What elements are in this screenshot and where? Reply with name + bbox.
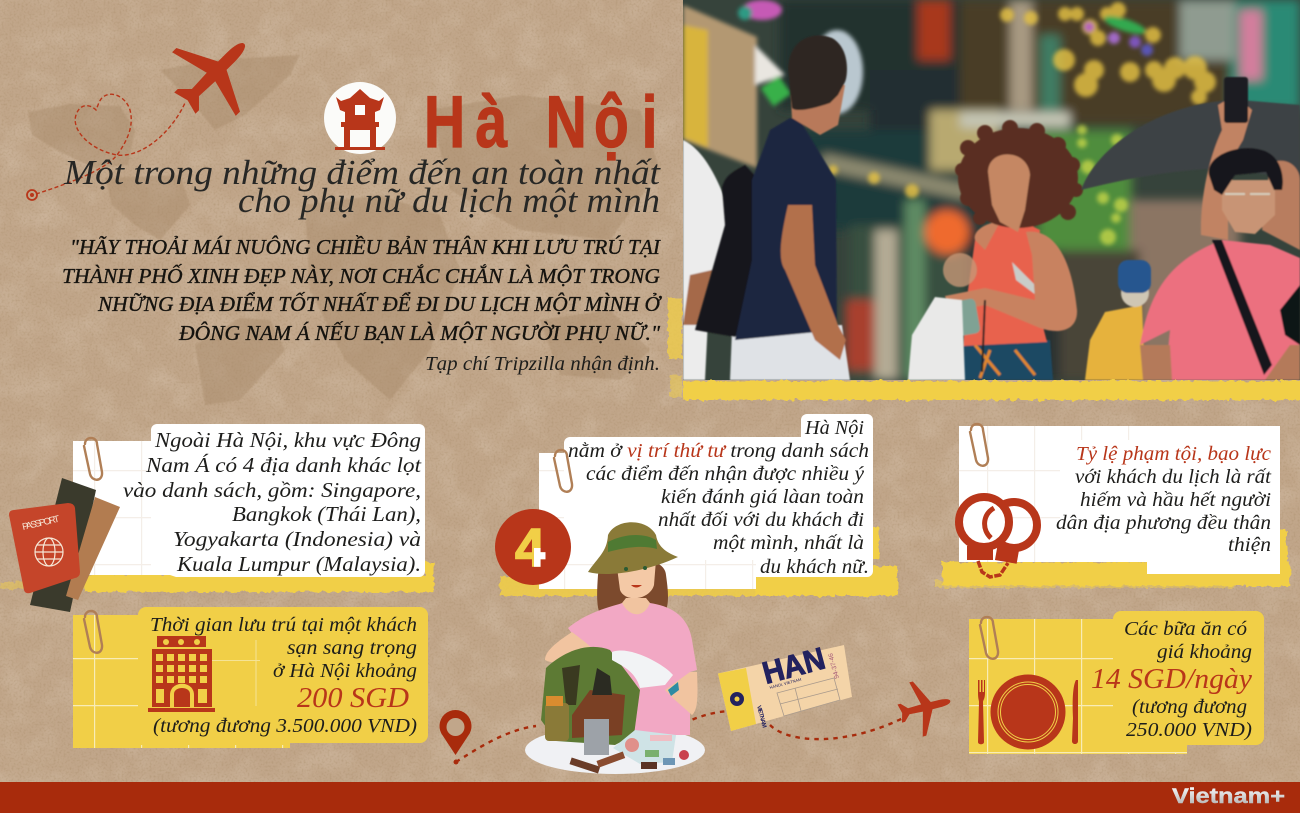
luggage tag: HAN (759, 641, 829, 691)
quote source: Tạp chí Tripzilla nhận định. (425, 354, 660, 375)
logo: Vietnam+: Vietnam+ (1172, 785, 1285, 808)
text block (150, 614, 417, 737)
text block: giá khoảng (1157, 641, 1252, 663)
quote: NHỮNG ĐỊA ĐIỂM TỐT NHẤT ĐỂ ĐI DU LỊCH MỘT MÌNH Ở (97, 292, 662, 316)
panel: meal price (969, 611, 1264, 754)
text block: Nam Á có 4 địa danh khác lọt (145, 453, 422, 477)
text block: Ngoài Hà Nội, khu vực Đông (154, 428, 421, 452)
luggage tag: HANOI, VIETNAM (769, 677, 802, 690)
backpack (541, 647, 640, 755)
text block: sạn sang trọng (287, 637, 417, 659)
text block: du khách nữ. (760, 556, 869, 578)
paperclip (554, 450, 572, 492)
text block: nằm ở vị trí thứ tư trong danh sách (568, 440, 869, 462)
subtitle: cho phụ nữ du lịch một mình (238, 182, 660, 220)
text block: với khách du lịch là rất (1075, 466, 1272, 488)
hat (588, 522, 678, 574)
text block: Hà Nội (804, 417, 864, 439)
street bokeh lights (828, 2, 1216, 245)
quote: ĐÔNG NAM Á NẾU BẠN LÀ MỘT NGƯỜI PHỤ NỮ." (178, 321, 660, 345)
panel: other destinations (0, 424, 434, 612)
icon: plate and cutlery (978, 674, 1078, 750)
yellow brush strip under photo (668, 298, 1300, 400)
icon: location pin (439, 710, 472, 764)
number badge 4 (495, 509, 571, 585)
text block (1091, 618, 1252, 741)
man with backpack (695, 35, 850, 380)
paperclip (84, 438, 102, 480)
number badge 4: 4 (515, 518, 545, 578)
icon: small airplane (893, 674, 957, 741)
people on the right with umbrella (908, 77, 1300, 380)
text block: Tỷ lệ phạm tội, bạo lực (1076, 443, 1271, 465)
icon: airplane (153, 12, 276, 135)
quote: THÀNH PHỐ XINH ĐẸP NÀY, NƠI CHẮC CHẮN LÀ MỘT TRONG (62, 264, 660, 288)
text block: 250.000 VND) (1126, 719, 1252, 741)
text block: Thời gian lưu trú tại một khách (150, 614, 417, 636)
text block: Bangkok (Thái Lan), (232, 502, 421, 526)
paperclip (84, 611, 102, 653)
text block: ở Hà Nội khoảng (273, 660, 417, 682)
text block: thiện (1228, 534, 1271, 556)
quote: "HÃY THOẢI MÁI NUÔNG CHIỀU BẢN THÂN KHI LƯU TRÚ TẠI (70, 235, 661, 259)
text block: nhất đối với du khách đi (658, 509, 864, 531)
icon: Temple of Literature gate (324, 82, 396, 154)
illustration: woman packing backpack (525, 522, 705, 774)
text block: hiếm và hầu hết người (1080, 489, 1271, 511)
text block: vào danh sách, gồm: Singapore, (123, 478, 421, 502)
luggage tag: VIETNAM (755, 705, 767, 729)
title: Hà Nội (424, 81, 657, 163)
text block: kiến đánh giá làan toàn (661, 486, 864, 508)
text block: (tương đương 3.500.000 VND) (153, 715, 417, 737)
text block: dân địa phương đều thân (1056, 512, 1271, 534)
panel: hotel price (73, 607, 428, 748)
world map watermark (28, 55, 660, 405)
quote (62, 235, 662, 345)
icon: passport and tickets (9, 478, 120, 612)
icon: handcuffs (959, 497, 1037, 577)
luggage tag: 94-37-46 (827, 652, 841, 679)
flight path with heart (27, 94, 185, 200)
dotted travel route (456, 711, 905, 762)
number badge 4: 4 (515, 518, 545, 578)
text block: 200 SGD (297, 682, 409, 714)
photo: tourists on a Hanoi street (683, 0, 1300, 380)
text block: các điểm đến nhận được nhiều ý (586, 463, 865, 485)
text block: Yogyakarta (Indonesia) và (173, 527, 421, 551)
text block (568, 417, 869, 578)
footer bar (0, 782, 1300, 813)
left shop sign (683, 0, 863, 168)
subtitle: Một trong những điểm đến an toàn nhất (63, 154, 662, 192)
text block: (tương đương (1132, 696, 1247, 718)
text block: Kuala Lumpur (Malaysia). (176, 552, 421, 576)
text block: một mình, nhất là (713, 532, 864, 554)
icon: passport and tickets: PASSPORT (21, 514, 61, 533)
panel: crime rate (935, 424, 1290, 588)
scattered items (569, 730, 689, 773)
luggage tag (718, 641, 852, 731)
woman with curly hair (945, 120, 1083, 380)
text block (123, 428, 422, 576)
text block: Các bữa ăn có (1124, 618, 1247, 640)
subtitle (63, 154, 662, 220)
text block (1056, 443, 1272, 556)
panel: fourth place ranking (495, 414, 898, 596)
icon: hotel (148, 636, 215, 712)
paperclip (970, 424, 988, 466)
text block: 14 SGD/ngày (1091, 663, 1252, 695)
paperclip (980, 617, 998, 659)
left passer-by in white shirt (683, 140, 726, 380)
